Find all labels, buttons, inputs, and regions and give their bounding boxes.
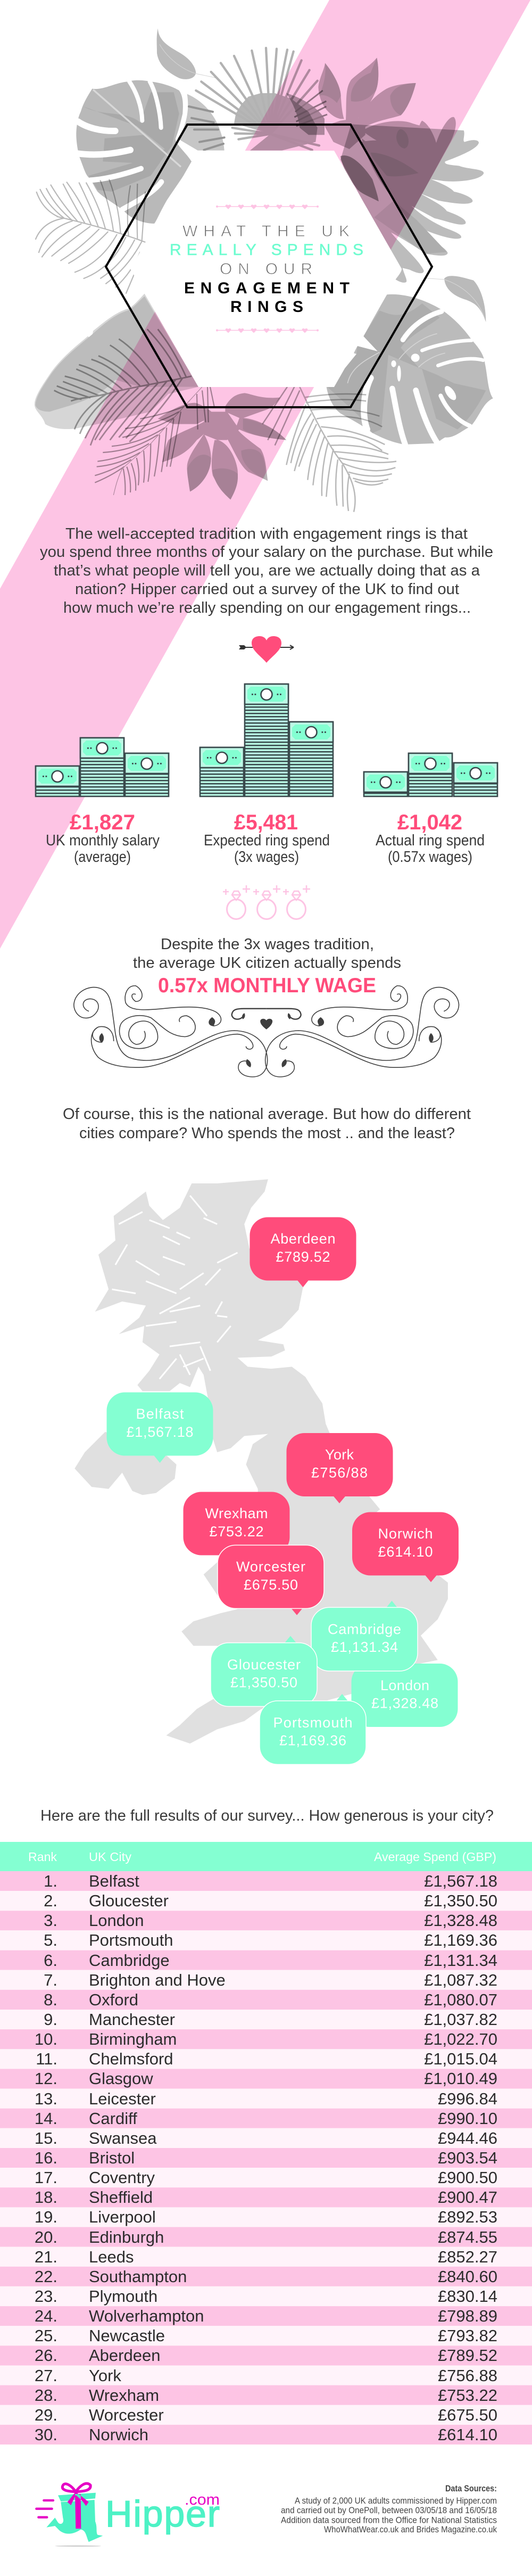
text: full results intro: Here are the full results of our survey... How generous is your city? <box>40 1807 494 1824</box>
city column: Liverpool <box>89 2208 156 2226</box>
stat: salary: £1,827 <box>70 811 135 834</box>
title line: rings: RINGS <box>230 298 303 316</box>
city column: Leeds <box>89 2248 134 2266</box>
spend column: £944.46 <box>438 2129 497 2147</box>
intro paragraph <box>40 525 493 616</box>
city column: Gloucester <box>89 1891 169 1910</box>
stat: actual ring spend: Actual ring spend <box>376 832 485 849</box>
callout: York: York <box>325 1447 354 1463</box>
spend column: £793.82 <box>438 2326 497 2345</box>
city column: Portsmouth <box>89 1931 173 1949</box>
city column: Wolverhampton <box>89 2307 204 2325</box>
city column: Sheffield <box>89 2188 153 2207</box>
spend column: £1,010.49 <box>424 2069 497 2088</box>
city column: Glasgow <box>89 2069 153 2088</box>
results table <box>0 1842 532 2445</box>
callout: Norwich: Norwich <box>378 1526 433 1542</box>
rank column: 5. <box>44 1931 57 1949</box>
leaf: monstera top left <box>76 80 192 224</box>
callout: Norwich <box>352 1512 459 1582</box>
stat: expected ring spend: Expected ring spend <box>204 832 330 849</box>
rank column: 14. <box>35 2109 57 2128</box>
spend column: £789.52 <box>438 2346 497 2365</box>
spend column: £798.89 <box>438 2307 497 2325</box>
callout: London <box>351 1664 458 1727</box>
stat: actual ring spend: (0.57x wages) <box>388 849 472 866</box>
city column: Birmingham <box>89 2030 177 2048</box>
rank column <box>35 1872 57 2444</box>
rank column: 12. <box>35 2069 57 2088</box>
city column: Newcastle <box>89 2326 165 2345</box>
spend column: £1,350.50 <box>424 1891 497 1910</box>
intro paragraph: The well-accepted tradition with engagement rings is that <box>65 525 468 542</box>
rank column: 18. <box>35 2188 57 2207</box>
text: national average question: cities compare? Who spends the most .. and the least? <box>79 1125 455 1142</box>
rank column: 6. <box>44 1951 57 1970</box>
logo: Hipper.com <box>36 2483 220 2547</box>
callout: Gloucester <box>211 1636 317 1707</box>
data sources note <box>281 2484 497 2534</box>
callout: Aberdeen: Aberdeen <box>270 1231 335 1247</box>
leaf: monstera bottom right <box>326 294 493 445</box>
leaf: feather palm left <box>36 179 145 294</box>
callout: London: £1,328.48 <box>371 1695 438 1711</box>
spend column: £1,328.48 <box>424 1911 497 1930</box>
leaf: fan palm <box>196 48 319 151</box>
logo: Hipper.com: .com <box>185 2491 220 2508</box>
city column: Cambridge <box>89 1951 170 1970</box>
callout: Cambridge <box>311 1601 418 1671</box>
stat: expected ring spend: (3x wages) <box>234 849 299 866</box>
logo: Hipper.com: Hipper <box>105 2493 220 2534</box>
table header: Average Spend (GBP) <box>374 1850 496 1864</box>
city column: Edinburgh <box>89 2228 164 2246</box>
rank column: 22. <box>35 2267 57 2286</box>
city column: Brighton and Hove <box>89 1971 226 1989</box>
city column: Swansea <box>89 2129 157 2147</box>
money stack chart: actual spend <box>364 753 497 796</box>
icon: three diamond rings <box>223 885 310 919</box>
rank column: 3. <box>44 1911 57 1930</box>
ornamental flourish <box>74 986 459 1077</box>
icon: heart with arrow <box>239 636 294 663</box>
callout: Worcester: £675.50 <box>244 1577 298 1593</box>
rank column: 27. <box>35 2366 57 2385</box>
intro paragraph: how much we’re really spending on our engagement rings... <box>63 599 471 616</box>
rank column: 13. <box>35 2089 57 2108</box>
callout: York <box>286 1433 393 1503</box>
intro paragraph: nation? Hipper carried out a survey of the UK to find out <box>75 581 459 598</box>
spend column: £996.84 <box>438 2089 497 2108</box>
rank column: 7. <box>44 1971 57 1989</box>
spend column: £1,080.07 <box>424 1990 497 2009</box>
city column: London <box>89 1911 144 1930</box>
rank column: 8. <box>44 1990 57 2009</box>
spend column: £753.22 <box>438 2386 497 2405</box>
data sources note: and carried out by OnePoll, between 03/05/18 and 16/05/18 <box>281 2506 497 2515</box>
stat: expected ring spend <box>204 811 330 866</box>
city column: Manchester <box>89 2010 175 2029</box>
leaf: banana leaf bottom left <box>35 294 198 429</box>
title block <box>170 204 363 333</box>
rank column: 17. <box>35 2168 57 2187</box>
spend column: £675.50 <box>438 2406 497 2424</box>
leaf: palm over banana <box>54 329 192 446</box>
city column: Southampton <box>89 2267 187 2286</box>
text: despite the tradition: Despite the 3x wages tradition, <box>161 936 374 953</box>
callout: Wrexham <box>183 1492 289 1556</box>
spend column: £1,131.34 <box>424 1951 497 1970</box>
leaf: mauve broad leaf lobes <box>318 57 456 220</box>
table header <box>0 1842 532 1871</box>
spend column: £614.10 <box>438 2425 497 2444</box>
rank column: 30. <box>35 2425 57 2444</box>
hero: tropical leaves <box>35 28 493 512</box>
spend column: £1,037.82 <box>424 2010 497 2029</box>
callout: Norwich: £614.10 <box>378 1544 433 1560</box>
rank column: 26. <box>35 2346 57 2365</box>
spend column: £1,087.32 <box>424 1971 497 1989</box>
stat: expected ring spend: £5,481 <box>234 811 298 834</box>
spend column: £1,567.18 <box>424 1872 497 1890</box>
city column: Belfast <box>89 1872 139 1890</box>
callout: Belfast: £1,567.18 <box>127 1424 194 1440</box>
spend column: £990.10 <box>438 2109 497 2128</box>
callout: Wrexham: Wrexham <box>205 1505 268 1521</box>
callout: Belfast <box>106 1393 213 1463</box>
city column: Plymouth <box>89 2287 157 2306</box>
spend column: £1,169.36 <box>424 1931 497 1949</box>
leaf: palm bottom centre <box>95 387 214 495</box>
rank column: 16. <box>35 2149 57 2167</box>
callout: York: £756/88 <box>311 1465 368 1481</box>
city column: Aberdeen <box>89 2346 160 2365</box>
stat: salary <box>46 811 160 866</box>
spend column: £1,015.04 <box>424 2050 497 2068</box>
callout: Cambridge: £1,131.34 <box>331 1639 398 1655</box>
rank column: 9. <box>44 2010 57 2029</box>
leaf: dark palm tip <box>177 94 225 151</box>
spend column: £874.55 <box>438 2228 497 2246</box>
leaf: small right leaf <box>427 276 486 322</box>
city column: Wrexham <box>89 2386 159 2405</box>
callout: Belfast: Belfast <box>136 1406 184 1422</box>
spend column <box>424 1872 497 2444</box>
spend column: £892.53 <box>438 2208 497 2226</box>
rank column: 2. <box>44 1891 57 1910</box>
hexagon outline <box>106 125 432 407</box>
text: despite the tradition <box>133 936 401 972</box>
city column: Oxford <box>89 1990 138 2009</box>
data sources note: Addition data sourced from the Office for National Statistics <box>281 2516 497 2525</box>
callout: Gloucester: £1,350.50 <box>230 1675 297 1691</box>
rank column: 10. <box>35 2030 57 2048</box>
callout: Worcester <box>218 1545 324 1615</box>
spend column: £1,022.70 <box>424 2030 497 2048</box>
intro paragraph: that’s what people will tell you, are we actually doing that as a <box>54 562 480 579</box>
leaf: small top leaf <box>157 28 215 79</box>
stat: salary: UK monthly salary <box>46 832 160 849</box>
leaf: dark palm overlap <box>286 90 327 135</box>
title line: on our: ON OUR <box>220 260 312 278</box>
rank column: 29. <box>35 2406 57 2424</box>
title line: really spends: REALLY SPENDS <box>170 241 363 259</box>
leaf: mauve leaf bottom centre <box>158 393 286 499</box>
city column: Chelmsford <box>89 2050 173 2068</box>
callout: Aberdeen <box>250 1217 356 1287</box>
diagonal pink band <box>0 0 530 949</box>
leaf: dark inner leaf <box>340 155 379 201</box>
stat: actual ring spend: £1,042 <box>397 811 462 834</box>
callout: London: London <box>380 1677 429 1693</box>
rank column: 21. <box>35 2248 57 2266</box>
rank column: 28. <box>35 2386 57 2405</box>
city column: Norwich <box>89 2425 148 2444</box>
bottom heart divider <box>216 328 319 333</box>
stat: salary: (average) <box>74 849 131 866</box>
callout: Wrexham: £753.22 <box>210 1524 264 1540</box>
city column: Cardiff <box>89 2109 137 2128</box>
spend column: £900.50 <box>438 2168 497 2187</box>
title line: what the uk: WHAT THE UK <box>182 223 350 240</box>
city column: Bristol <box>89 2149 135 2167</box>
leaf: right split leaf <box>340 124 484 283</box>
spend column: £830.14 <box>438 2287 497 2306</box>
city column <box>89 1872 226 2444</box>
callout: Portsmouth: £1,169.36 <box>279 1732 346 1748</box>
city column: York <box>89 2366 121 2385</box>
spend column: £840.60 <box>438 2267 497 2286</box>
map of the UK <box>74 1179 448 1743</box>
rank column: 20. <box>35 2228 57 2246</box>
callout: Worcester: Worcester <box>236 1559 305 1575</box>
spend column: £900.47 <box>438 2188 497 2207</box>
city column: Coventry <box>89 2168 155 2187</box>
rank column: 15. <box>35 2129 57 2147</box>
stat: actual ring spend <box>376 811 485 866</box>
rank column: 19. <box>35 2208 57 2226</box>
spend column: £903.54 <box>438 2149 497 2167</box>
intro paragraph: you spend three months of your salary on the purchase. But while <box>40 544 493 561</box>
callout: Portsmouth <box>260 1694 366 1764</box>
table header: Rank <box>28 1850 57 1864</box>
callout: 0.57x monthly wage: 0.57x MONTHLY WAGE <box>158 974 376 997</box>
top heart divider <box>216 204 319 209</box>
city column: Worcester <box>89 2406 164 2424</box>
rank column: 1. <box>44 1872 57 1890</box>
spend column: £756.88 <box>438 2366 497 2385</box>
white hexagon panel <box>130 151 402 387</box>
rank column: 24. <box>35 2307 57 2325</box>
leaf: palm bottom right <box>262 387 396 512</box>
rank column: 25. <box>35 2326 57 2345</box>
money stack chart: salary <box>36 738 169 796</box>
money stack chart: expected spend <box>200 684 333 796</box>
data sources note: A study of 2,000 UK adults commissioned by Hipper.com <box>295 2496 497 2506</box>
rank column: 23. <box>35 2287 57 2306</box>
text: national average question <box>63 1106 471 1142</box>
callout: Portsmouth: Portsmouth <box>273 1715 352 1731</box>
text: despite the tradition: the average UK citizen actually spends <box>133 954 401 972</box>
title line: engagement: ENGAGEMENT <box>184 279 350 297</box>
text: national average question: Of course, this is the national average. But how do different <box>63 1106 471 1123</box>
callout: Gloucester: Gloucester <box>227 1657 301 1673</box>
table header: UK City <box>89 1850 132 1864</box>
spend column: £852.27 <box>438 2248 497 2266</box>
data sources note: Data Sources: <box>445 2484 497 2493</box>
data sources note: WhoWhatWear.co.uk and Brides Magazine.co.uk <box>324 2525 497 2534</box>
city column: Leicester <box>89 2089 156 2108</box>
callout: Aberdeen: £789.52 <box>276 1249 330 1265</box>
rank column: 11. <box>36 2050 57 2068</box>
table row backgrounds <box>0 1871 532 2445</box>
callout: Cambridge: Cambridge <box>328 1622 401 1637</box>
